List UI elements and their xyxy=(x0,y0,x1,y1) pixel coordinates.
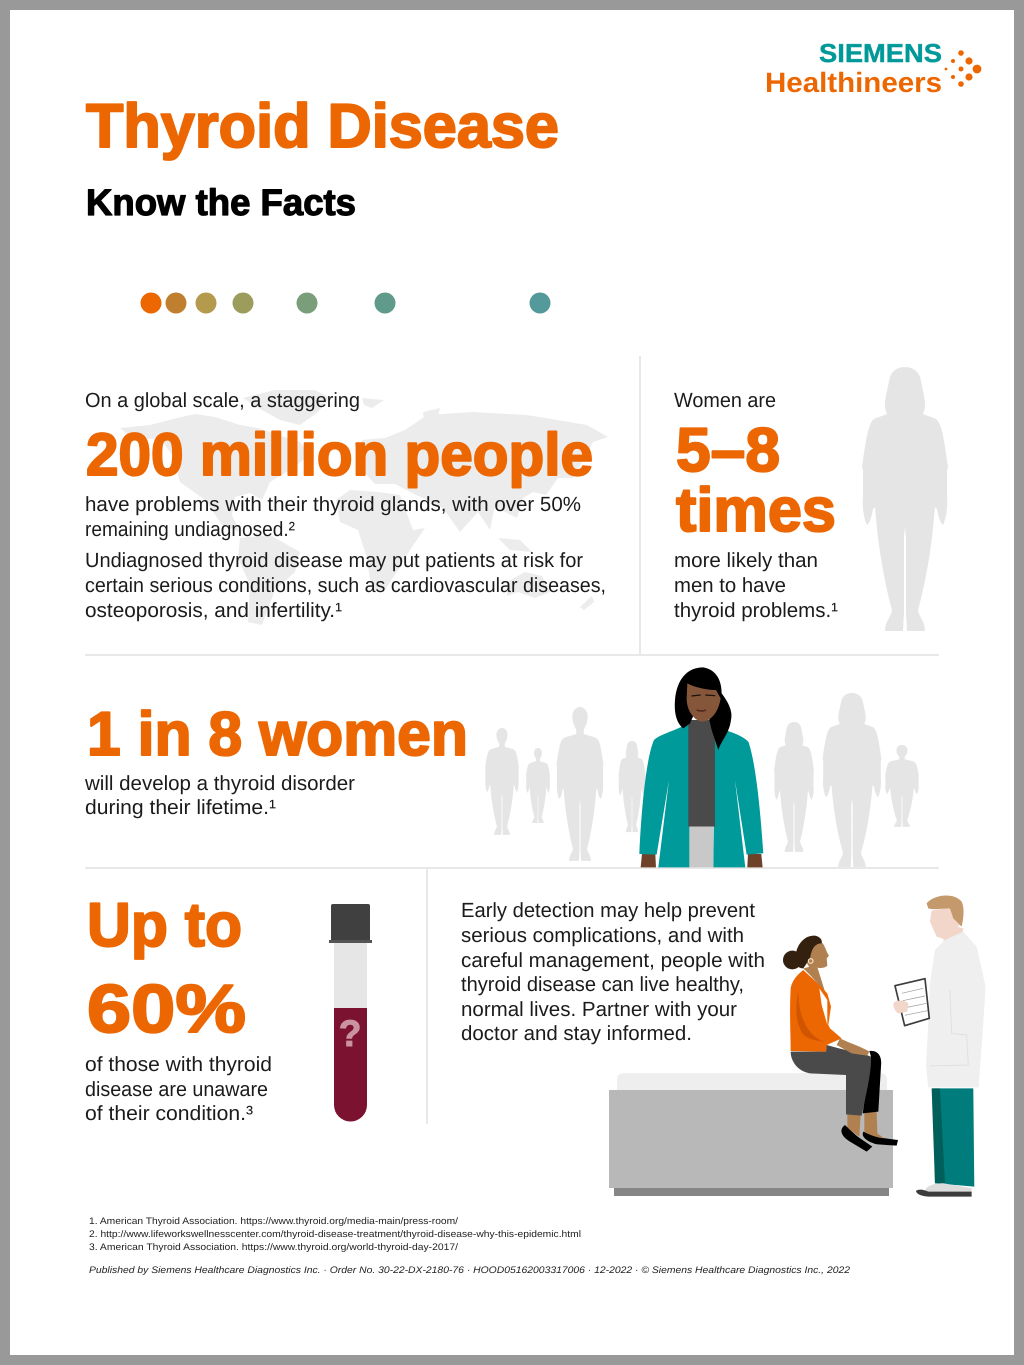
headline up to 60 percent: 60% xyxy=(87,971,246,1047)
panel: women versus men xyxy=(674,367,948,631)
logo: Siemens Healthineers: Healthineers xyxy=(765,67,942,98)
logo: Siemens Healthineers: SIEMENS xyxy=(819,38,942,68)
references: 3. American Thyroid Association. https://www.thyroid.org/world-thyroid-day-2017/ xyxy=(89,1242,458,1253)
statistic 5 to 8 times: 5–8 xyxy=(676,416,780,485)
references xyxy=(89,1216,581,1253)
headline 1 in 8 women: 1 in 8 women xyxy=(87,700,468,769)
publisher line: Published by Siemens Healthcare Diagnostics Inc. · Order No. 30-22-DX-2180-76 · HOOD05162003317006 · 12-2022 · © Siemens Healthcare Diagnostics Inc., 2022 xyxy=(89,1265,851,1276)
illustration: patient and doctor xyxy=(609,895,986,1197)
body text: Undiagnosed thyroid disease may put patients at risk for xyxy=(85,549,583,572)
panel: early detection text: careful management, people with xyxy=(461,949,765,972)
body text: have problems with their thyroid glands, with over 50% xyxy=(85,493,581,516)
panel: early detection text: thyroid disease can live healthy, xyxy=(461,973,744,996)
60 percent body text xyxy=(85,1053,272,1125)
subtitle: Know the Facts xyxy=(86,182,356,223)
60 percent body text: of their condition.³ xyxy=(85,1102,253,1125)
references: 2. http://www.lifeworkswellnesscenter.com/thyroid-disease-treatment/thyroid-disease-why-this-epidemic.html xyxy=(89,1229,581,1240)
panel: early detection text: normal lives. Partner with your xyxy=(461,998,737,1021)
women are label: Women are xyxy=(674,389,776,412)
decorative gradient dots xyxy=(140,292,550,314)
1 in 8 body text xyxy=(84,772,355,819)
60 percent body text: disease are unaware xyxy=(85,1078,268,1101)
headline statistic: 200 million people xyxy=(86,421,593,488)
divider vertical bottom xyxy=(426,868,428,1124)
divider horizontal one xyxy=(85,654,939,656)
panel: up to 60% xyxy=(85,891,372,1125)
title: Thyroid Disease xyxy=(86,92,559,161)
icon: blood test tube xyxy=(329,904,372,1122)
panel: early detection text xyxy=(461,899,765,1045)
exam bed xyxy=(609,1073,893,1196)
icon: blood test tube: ? xyxy=(339,1013,361,1054)
panel: 1 in 8 women xyxy=(84,667,919,867)
divider horizontal two xyxy=(85,867,939,869)
illustration: woman in teal coat xyxy=(639,667,763,867)
women body text: more likely than xyxy=(674,549,818,572)
panel: early detection text: doctor and stay informed. xyxy=(461,1022,692,1045)
statistic 5 to 8 times xyxy=(676,416,836,545)
doctor xyxy=(893,895,986,1197)
statistic 5 to 8 times: times xyxy=(676,476,836,545)
body text: remaining undiagnosed.² xyxy=(85,518,295,541)
intro line: On a global scale, a staggering xyxy=(85,389,360,412)
panel: early detection text: serious complications, and with xyxy=(461,924,744,947)
icon: woman silhouette xyxy=(862,367,948,631)
silhouettes crowd xyxy=(485,693,919,867)
women body text: thyroid problems.¹ xyxy=(674,599,838,622)
references: 1. American Thyroid Association. https://www.thyroid.org/media-main/press-room/ xyxy=(89,1216,458,1227)
panel: global prevalence xyxy=(85,389,608,625)
panel: early detection text: Early detection may help prevent xyxy=(461,899,755,922)
60 percent body text: of those with thyroid xyxy=(85,1053,272,1076)
body text: certain serious conditions, such as cardiovascular diseases, xyxy=(85,574,606,597)
body text: osteoporosis, and infertility.¹ xyxy=(85,599,342,622)
women body text xyxy=(674,549,838,622)
headline up to 60 percent: Up to xyxy=(87,891,242,960)
world map background xyxy=(120,390,608,625)
1 in 8 body text: during their lifetime.¹ xyxy=(85,796,276,819)
headline up to 60 percent xyxy=(87,891,246,1047)
women body text: men to have xyxy=(674,574,786,597)
divider vertical top xyxy=(639,356,641,654)
patient xyxy=(783,936,898,1152)
1 in 8 body text: will develop a thyroid disorder xyxy=(84,772,355,795)
logo: Siemens Healthineers xyxy=(765,38,981,98)
body text xyxy=(85,493,606,622)
